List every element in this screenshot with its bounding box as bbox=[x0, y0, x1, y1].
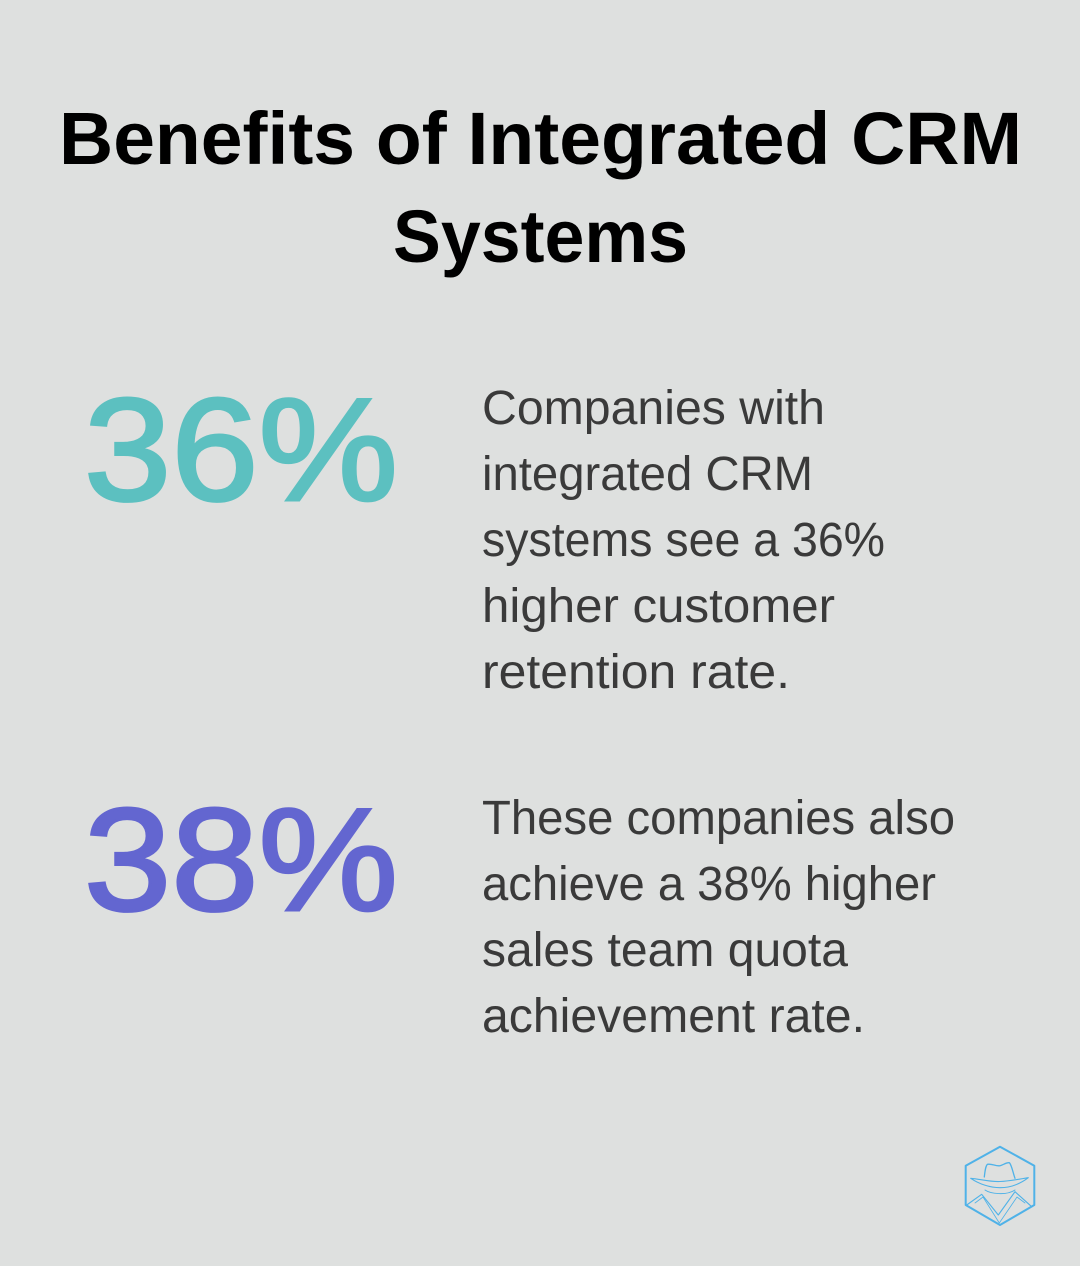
statistic: 36%: 36% bbox=[84, 368, 398, 531]
title: Benefits of Integrated CRM bbox=[59, 97, 1022, 180]
text block: sales quota: sales team quota bbox=[482, 924, 848, 977]
text block: sales quota: achievement rate. bbox=[482, 990, 865, 1043]
text block: customer retention: systems see a 36% bbox=[482, 514, 885, 567]
text block: customer retention: retention rate. bbox=[482, 646, 790, 699]
title: Systems bbox=[393, 195, 688, 278]
text block: customer retention bbox=[482, 382, 885, 699]
title bbox=[59, 97, 1022, 278]
icon: hexagon spy logo bbox=[966, 1147, 1034, 1225]
text block: sales quota bbox=[482, 792, 955, 1043]
statistic: 38%: 38% bbox=[84, 778, 398, 941]
text block: customer retention: integrated CRM bbox=[482, 448, 813, 501]
text block: sales quota: These companies also bbox=[482, 792, 955, 845]
text block: customer retention: higher customer bbox=[482, 580, 835, 633]
text block: sales quota: achieve a 38% higher bbox=[482, 858, 936, 911]
text block: customer retention: Companies with bbox=[482, 382, 825, 435]
